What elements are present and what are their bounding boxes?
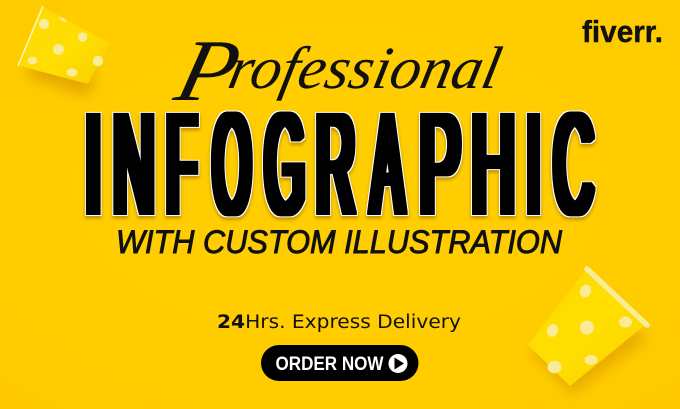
heading: INFOGRAPHIC: N [113, 85, 155, 245]
subheading: WITH CUSTOM ILLUSTRATION [116, 224, 563, 260]
heading: Professional script [166, 22, 507, 120]
heading: INFOGRAPHIC: I [85, 85, 102, 245]
icon: polka dot cup top left [18, 6, 109, 96]
heading: INFOGRAPHIC: R [316, 85, 355, 245]
delivery line: 24Hrs. Express Delivery [217, 312, 461, 333]
heading: INFOGRAPHIC: H [472, 84, 515, 245]
heading: INFOGRAPHIC: I [527, 83, 540, 245]
heading: INFOGRAPHIC: O [213, 83, 251, 244]
button: order now [261, 345, 418, 381]
heading: INFOGRAPHIC: A [372, 83, 403, 244]
heading: INFOGRAPHIC: F [167, 84, 196, 244]
heading: INFOGRAPHIC: C [554, 84, 593, 245]
heading: INFOGRAPHIC [85, 83, 593, 245]
heading: Professional script: P [166, 22, 249, 120]
icon: play [388, 354, 408, 373]
logo: fiverr: fiverr. [582, 14, 663, 49]
icon: polka dot cup bottom right [528, 269, 648, 394]
heading: Professional script: rofessional [223, 36, 507, 102]
heading: INFOGRAPHIC: P [420, 85, 461, 245]
heading: INFOGRAPHIC: G [265, 83, 305, 244]
button: order now: ORDER NOW [276, 354, 384, 375]
